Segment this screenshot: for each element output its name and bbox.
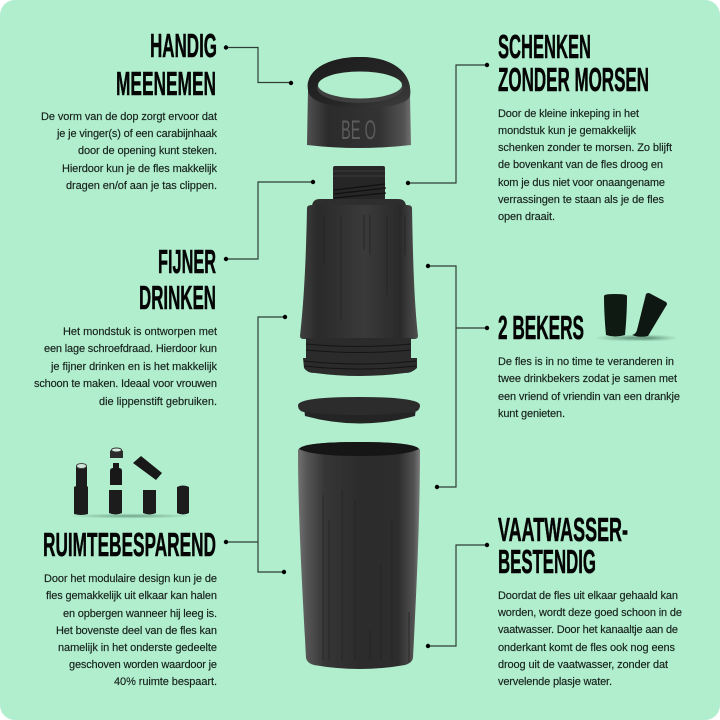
seal ring [298,397,420,424]
heading: schenken zonder morsen: SCHENKEN [498,28,591,65]
heading: 2 bekers: 2 BEKERS [498,309,584,346]
text: schenken zonder morsen: de bovenkant van de fles droog en [498,159,663,171]
icon: modular bottle steps [69,448,193,518]
lower cup [298,442,420,669]
text: vaatwasserbestendig: vervelende plasje water. [498,676,612,688]
text: ruimtebesparend: en opbergen wanneer hij leeg is. [63,608,217,620]
text: handig meenemen: Hierdoor kun je de fles makkelijk [62,163,218,175]
heading: vaatwasserbestendig: BESTENDIG [498,543,596,580]
text: handig meenemen: je je vinger(s) of een carabijnhaak [56,128,218,140]
text: handig meenemen: De vorm van de dop zorgt ervoor dat [41,111,217,123]
text: vaatwasserbestendig: droog uit de vaatwasser, zonder dat [498,659,668,671]
text: schenken zonder morsen: verrassingen te staan als je de fles [498,194,664,206]
heading: schenken zonder morsen [498,28,649,98]
text: ruimtebesparend [44,573,217,688]
text: vaatwasserbestendig [497,590,682,688]
connector: handig meenemen [224,45,293,85]
text: ruimtebesparend: 40% ruimte bespaart. [114,676,217,688]
icon: two cups [594,293,678,342]
text: 2 bekers: De fles is in no time te veranderen in [498,356,674,368]
heading: handig meenemen: MEENEMEN [116,65,216,102]
connector: ruimtebesparend [224,315,287,574]
upper bottle section [300,166,418,376]
text: schenken zonder morsen: open draait. [498,211,555,223]
text: fijner drinken: een lage schroefdraad. Hierdoor kun [44,343,217,355]
heading: vaatwasserbestendig [498,511,628,580]
text: vaatwasserbestendig: Doordat de fles uit elkaar gehaald kan [498,590,678,602]
text: 2 bekers: een vriend of vriendin van een drankje [498,391,680,403]
text: vaatwasserbestendig: vaatwasser. Door het kanaaltje aan de [498,624,678,636]
heading: handig meenemen: HANDIG [150,27,217,64]
text: schenken zonder morsen: Door de kleine inkeping in het [498,108,639,120]
connector: vaatwasserbestendig [426,543,489,648]
text: ruimtebesparend: Door het modulaire design kun je de [44,573,217,585]
text: handig meenemen: door de opening kunt steken. [78,145,217,157]
text: ruimtebesparend: Het bovenste deel van de fles kan [56,625,217,637]
text: vaatwasserbestendig: onderkant komt de fles ook nog eens [498,642,676,654]
text: fijner drinken: schoon te maken. Ideaal voor vrouwen [34,378,217,390]
text: vaatwasserbestendig: worden, wordt deze goed schoon in de [497,607,682,619]
text: ruimtebesparend: namelijk in het onderste gedeelte [58,642,217,654]
heading: fijner drinken: DRINKEN [139,279,216,316]
text: fijner drinken: je fijner drinken en is het makkelijk [50,361,218,373]
text: ruimtebesparend: geschoven worden waardoor je [69,659,217,671]
connector: fijner drinken [224,180,315,261]
text: 2 bekers [498,356,680,420]
text: fijner drinken: Het mondstuk is ontworpen met [63,326,217,338]
text: schenken zonder morsen: mondstuk kun je gemakkelijk [498,125,636,137]
connector: 2 bekers [426,264,489,489]
text: fijner drinken [34,326,218,408]
connector: schenken zonder morsen [406,63,489,185]
text: ruimtebesparend: fles gemakkelijk uit elkaar kan halen [46,590,217,602]
text: FIJNER [158,243,216,280]
bottle cap: BE O [341,115,376,145]
heading: handig meenemen [116,27,217,102]
heading: ruimtebesparend: RUIMTEBESPAREND [43,526,216,563]
text: fijner drinken: die lippenstift gebruiken. [99,396,217,408]
text: schenken zonder morsen: schenken zonder te morsen. Zo blijft [498,142,672,154]
text: schenken zonder morsen: kom je dus niet voor onaangename [498,177,665,189]
bottle cap [307,57,411,148]
text: schenken zonder morsen [498,108,672,223]
text: handig meenemen: dragen en/of aan je tas clippen. [66,180,217,192]
text: 2 bekers: twee drinkbekers zodat je samen met [498,373,677,385]
text: 2 bekers: kunt genieten. [498,408,565,420]
text: handig meenemen [41,111,218,192]
heading: fijner drinken [139,243,216,316]
